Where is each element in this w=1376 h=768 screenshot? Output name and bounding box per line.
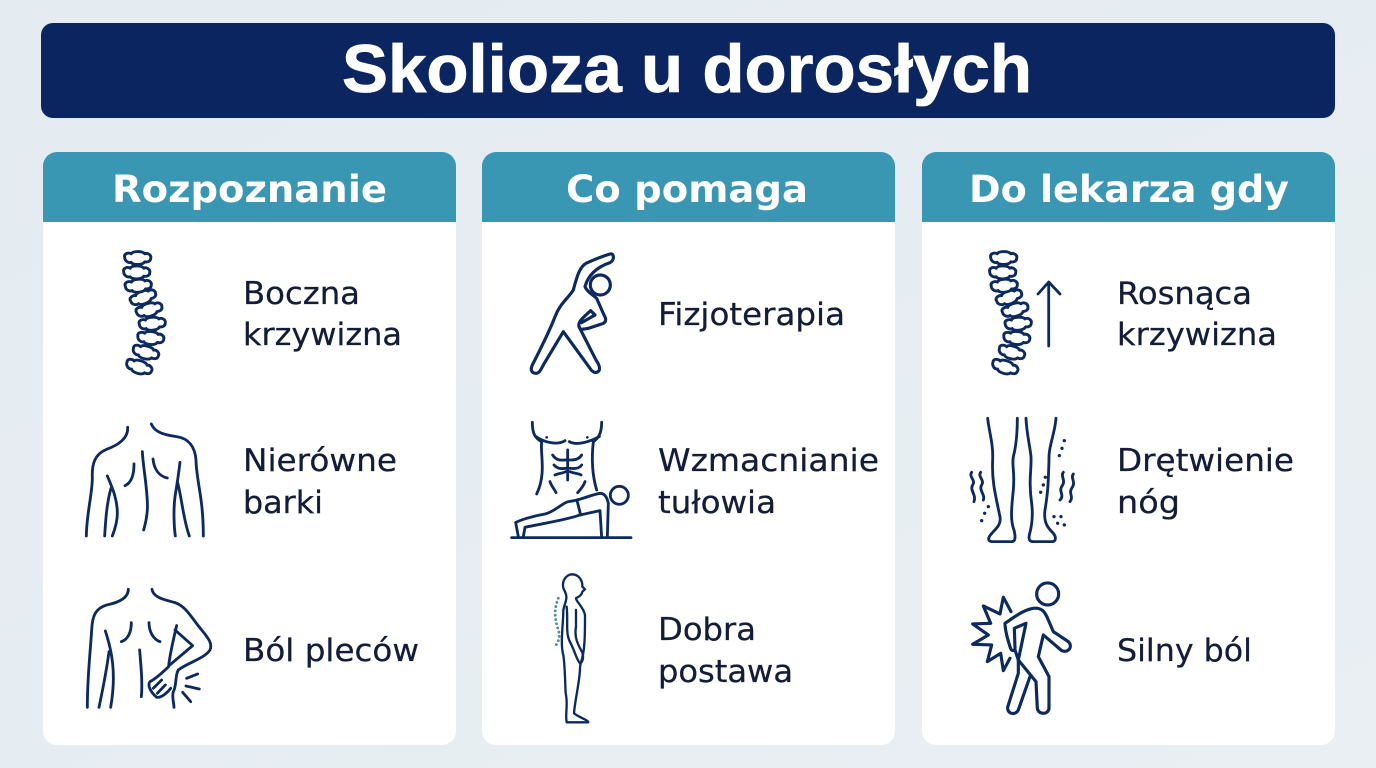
text: Drętwienie nóg: nóg [1117,485,1180,521]
icon: good posture [554,574,588,722]
text: Rosnąca krzywizna: krzywizna [1117,317,1277,353]
text: Ból pleców: Ból pleców [243,633,419,669]
panel: Do lekarza gdy [922,152,1335,745]
text: Wzmacnianie tułowia: tułowia [658,485,776,521]
text: Dobra postawa: postawa [658,654,793,690]
icon: side stretch [531,254,613,373]
icon: core strengthening [512,422,631,538]
text: Rosnąca krzywizna [1117,276,1277,353]
icon: uneven shoulders [86,424,203,536]
icon: back pain [87,589,211,707]
heading: Co pomaga [482,152,895,222]
heading: Do lekarza gdy: Do lekarza gdy [969,168,1289,211]
icon: leg numbness [971,418,1074,542]
text: Nierówne barki: barki [243,485,323,521]
text: Wzmacnianie tułowia [658,443,879,521]
text: Dobra postawa [658,612,793,690]
text: Silny ból: Silny ból [1117,633,1252,669]
text: Wzmacnianie tułowia: Wzmacnianie [658,443,879,479]
text: Boczna krzywizna: Boczna [243,276,360,312]
text: Fizjoterapia: Fizjoterapia [658,297,845,333]
title: Skolioza u dorosłych [342,31,1032,107]
text: Nierówne barki: Nierówne [243,443,397,479]
icon: curved spine [124,252,166,377]
heading: Do lekarza gdy [922,152,1335,222]
text: Boczna krzywizna: krzywizna [243,317,402,353]
text: Boczna krzywizna [243,276,402,353]
heading: Rozpoznanie: Rozpoznanie [112,168,387,211]
heading: Rozpoznanie [43,152,456,222]
icon: severe pain [973,583,1070,713]
text: Drętwienie nóg [1117,443,1294,521]
icon: growing curve [990,252,1060,377]
text: Dobra postawa: Dobra [658,612,756,648]
text: Drętwienie nóg: Drętwienie [1117,443,1294,479]
title [41,23,1335,118]
text: Nierówne barki [243,443,397,521]
text: Rosnąca krzywizna: Rosnąca [1117,276,1252,312]
panel: Rozpoznanie [43,152,456,745]
panel: Co pomaga [482,152,895,745]
heading: Co pomaga: Co pomaga [566,168,808,211]
